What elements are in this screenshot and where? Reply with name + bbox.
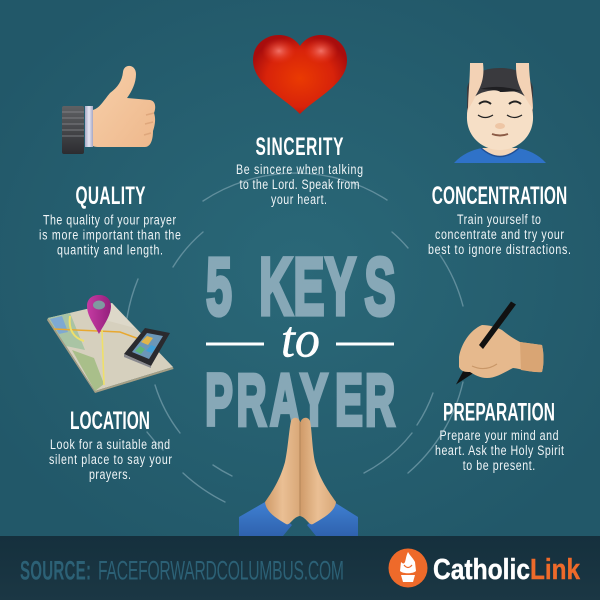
panel: location: [49, 407, 172, 482]
decorative ring arcs: [127, 173, 463, 502]
icon: praying hands: [239, 418, 358, 536]
text: sincerity line 1: Be sincere when talking: [236, 162, 363, 177]
right rule: [336, 342, 394, 346]
icon: thumbs up: [62, 66, 155, 154]
panel: sincerity: [236, 133, 363, 207]
logo mark: [388, 548, 428, 588]
left rule: [206, 342, 264, 346]
footer bar: [0, 536, 600, 600]
text: sincerity line 3: your heart.: [271, 192, 327, 207]
heading: quality: QUALITY: [76, 182, 146, 210]
text: quality line 3: quantity and length.: [57, 242, 163, 258]
text: preparation line 1: Prepare your mind and: [439, 428, 559, 443]
icon: head massage: [454, 63, 546, 163]
source url: FACEFORWARDCOLUMBUS.COM: [98, 555, 344, 586]
title: 5 keys to prayer: [205, 242, 396, 441]
heading: preparation: PREPARATION: [443, 399, 555, 427]
logo: catholic link: [388, 548, 581, 588]
icon: map pin: [87, 295, 111, 334]
logo wordmark link: Link: [530, 554, 581, 586]
text: concentration line 1: Train yourself to: [457, 212, 541, 227]
icon: heart: [253, 35, 347, 114]
text: location line 1: Look for a suitable and: [50, 437, 170, 452]
text: preparation line 2: heart. Ask the Holy Spirit: [435, 443, 564, 458]
panel: preparation: [435, 399, 564, 473]
logo wordmark catholic: Catholic: [433, 554, 530, 586]
panel: concentration: [428, 182, 571, 257]
text: location line 3: prayers.: [89, 467, 131, 482]
text: sincerity line 2: to the Lord. Speak from: [239, 177, 360, 192]
icon: phone: [124, 328, 170, 368]
text: quality line 2: is more important than the: [39, 227, 181, 243]
heading: location: LOCATION: [70, 407, 150, 435]
panel: quality: [39, 182, 181, 258]
heading: concentration: CONCENTRATION: [432, 182, 567, 210]
text: concentration line 3: best to ignore distractions.: [428, 242, 571, 257]
title line: prayer: PRAYER: [205, 359, 395, 441]
text: location line 2: silent place to say your: [49, 452, 172, 467]
source line: [20, 555, 344, 586]
title word: to: to: [281, 312, 320, 368]
title line: 5 keys: 5 KEYS: [206, 242, 396, 333]
icon: map with pin and phone: [47, 295, 174, 393]
text: quality line 1: The quality of your prayer: [43, 212, 176, 228]
text: preparation line 3: to be present.: [463, 458, 535, 473]
heading: sincerity: SINCERITY: [256, 133, 344, 161]
icon: hand with pen: [456, 302, 544, 384]
text: concentration line 2: concentrate and try your: [435, 227, 564, 242]
source label: SOURCE:: [20, 555, 91, 586]
